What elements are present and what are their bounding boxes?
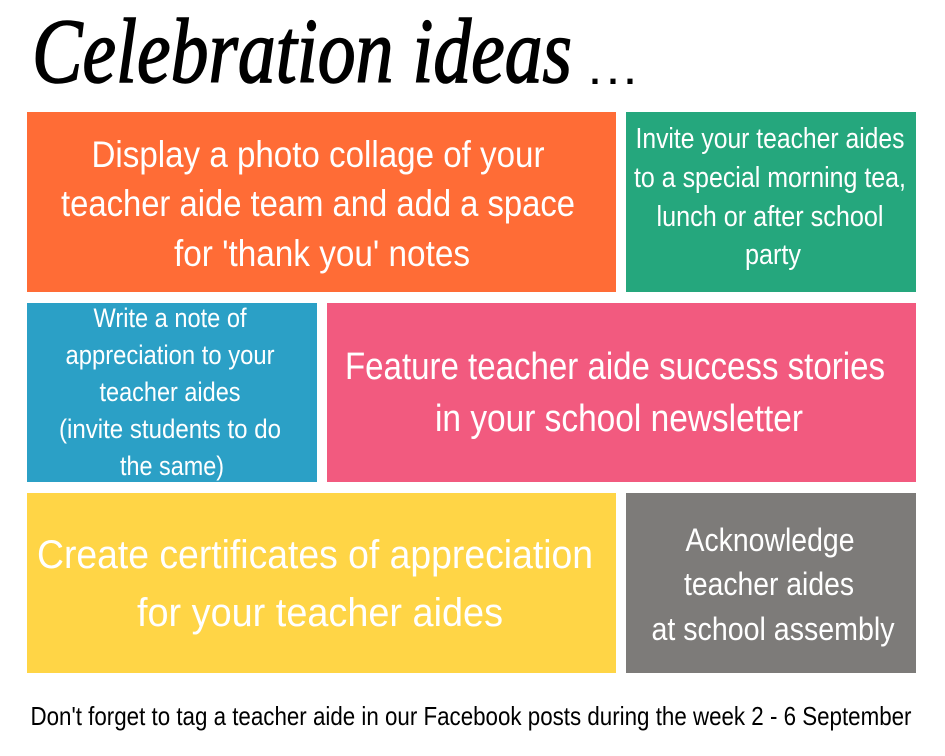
panel: school assembly: teacher aides xyxy=(684,566,854,602)
panel: school assembly: at school assembly xyxy=(652,611,894,647)
panel: success stories: in your school newsletter xyxy=(435,398,803,440)
panel: school assembly xyxy=(626,493,916,673)
panel: success stories xyxy=(327,303,916,482)
panel: photo collage xyxy=(27,112,616,292)
panel: note of appreciation: teacher aides xyxy=(100,377,240,407)
panel: note of appreciation xyxy=(27,303,317,482)
panel: photo collage: Display a photo collage of your xyxy=(92,134,544,175)
panel: photo collage: for 'thank you' notes xyxy=(174,233,470,274)
panel: school assembly: Acknowledge xyxy=(686,522,854,558)
panel: morning tea: party xyxy=(745,239,802,271)
panel: morning tea: to a special morning tea, xyxy=(634,162,906,194)
panel: note of appreciation: Write a note of xyxy=(94,303,247,333)
panel: morning tea: lunch or after school xyxy=(656,201,884,233)
panel: note of appreciation: the same) xyxy=(120,451,224,481)
panel: morning tea xyxy=(626,112,916,292)
title: Celebration ideas xyxy=(32,0,572,102)
panel: note of appreciation: appreciation to your xyxy=(66,340,274,370)
panel: morning tea: Invite your teacher aides xyxy=(636,123,904,155)
panel: certificates xyxy=(27,493,616,673)
panel: certificates: for your teacher aides xyxy=(137,591,503,635)
panel: note of appreciation: (invite students to do xyxy=(59,414,281,444)
title: ... xyxy=(590,51,635,92)
panel: certificates: Create certificates of appreciation xyxy=(37,533,593,577)
panel: photo collage: teacher aide team and add a space xyxy=(61,183,575,224)
